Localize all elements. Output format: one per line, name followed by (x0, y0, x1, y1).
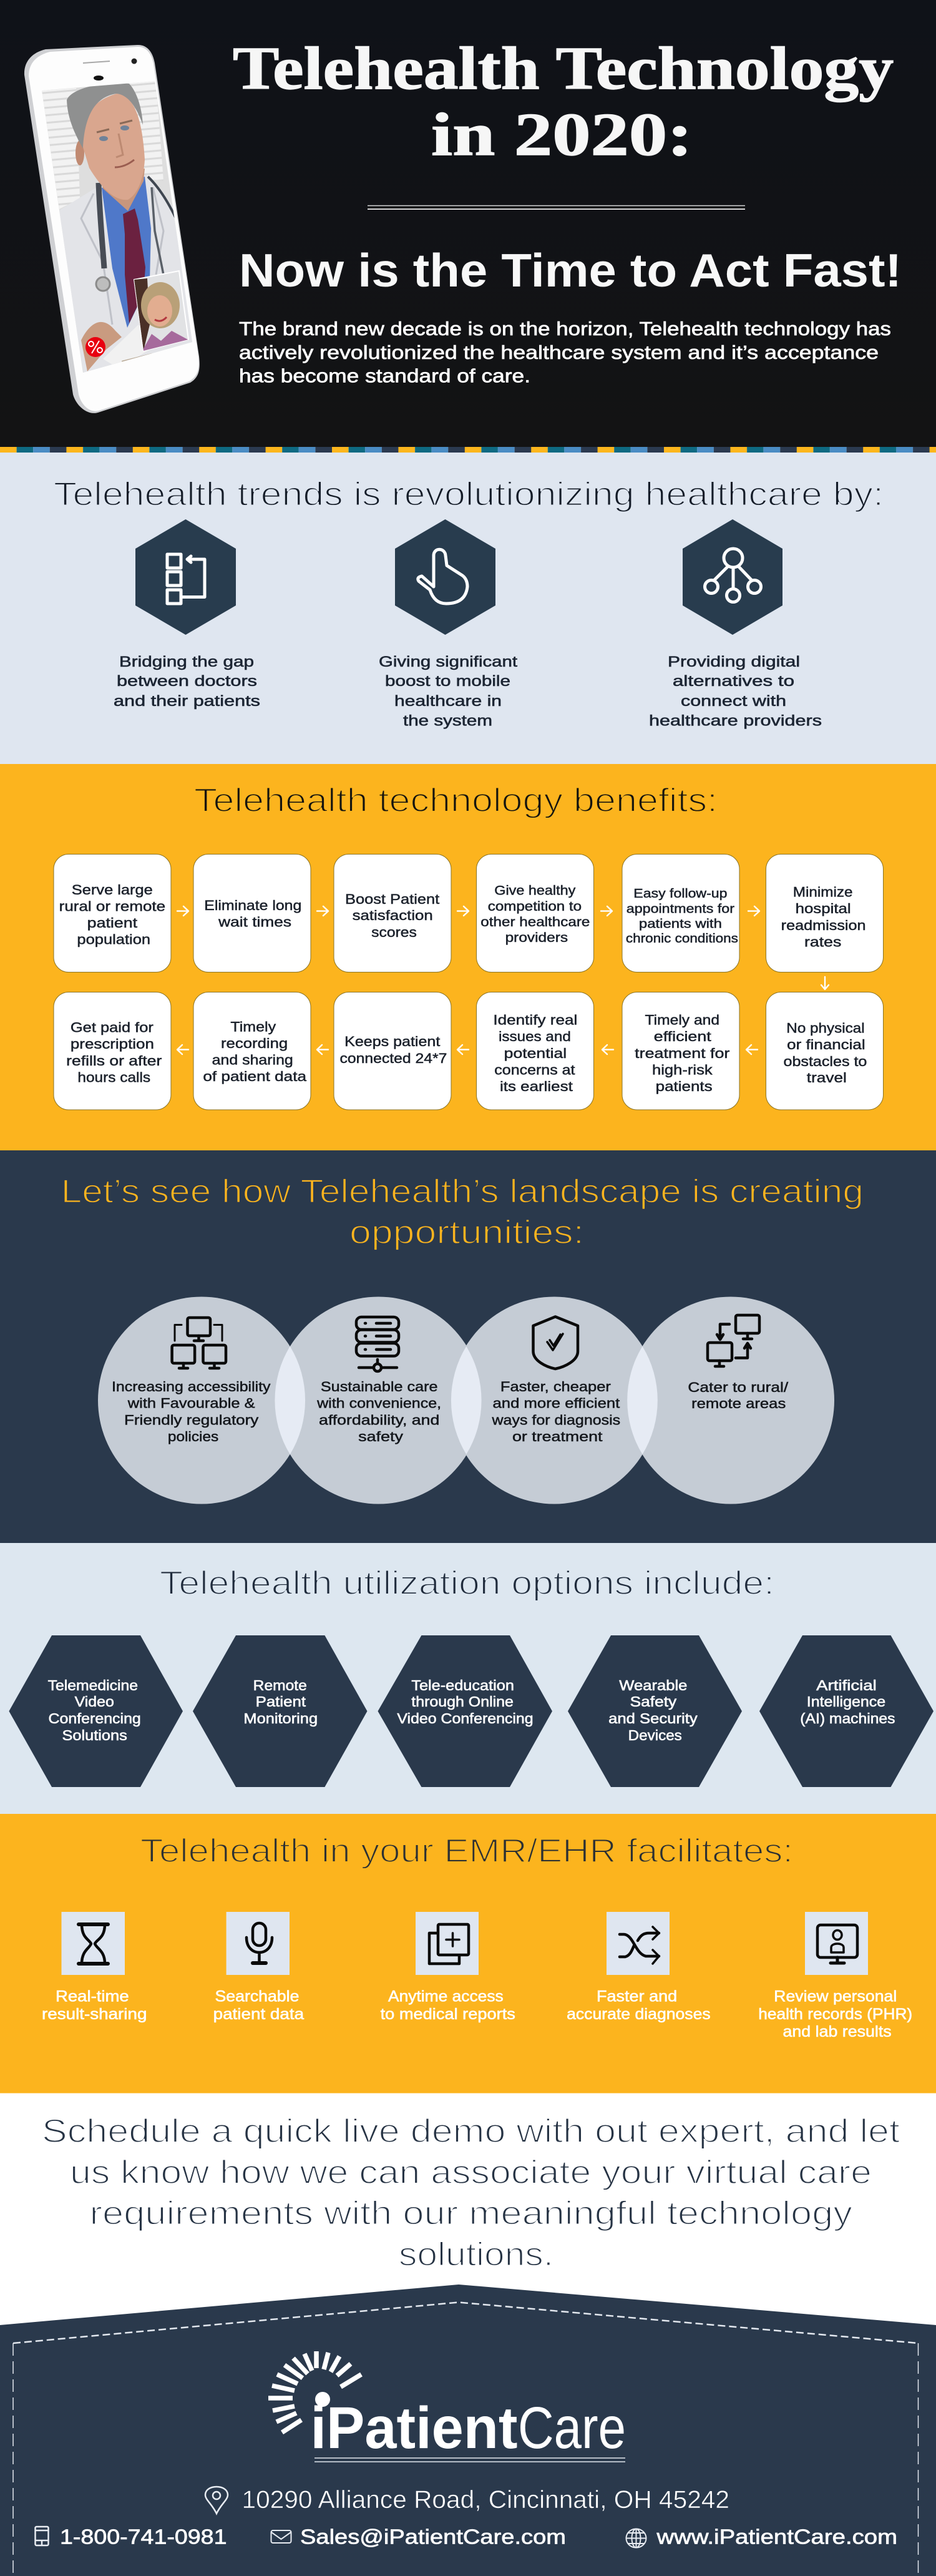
hexagon: telemedicine (9, 1635, 183, 1787)
circle text: and more efficient (493, 1396, 620, 1411)
item: medical reports (381, 1912, 515, 2023)
item: real-time result sharing: result-sharing (42, 2005, 147, 2023)
card row 2: its earliest (500, 1079, 573, 1094)
subtitle: Now is the Time to Act Fast! (239, 244, 902, 296)
card row 1: rural or remote (59, 899, 165, 914)
icon: server stack (356, 1317, 399, 1371)
hexagon: wearables: Wearable (619, 1677, 687, 1693)
item: personal health records: and lab results (782, 2023, 892, 2040)
card row 1: competition to (488, 899, 582, 914)
icon: location pin (205, 2487, 228, 2514)
panel: header (0, 0, 936, 447)
intro paragraph: has become standard of care. (239, 366, 530, 387)
icon: stacked documents with plus (429, 1924, 469, 1964)
intro paragraph (239, 318, 891, 387)
item: medical reports: Anytime access (388, 1988, 504, 2005)
item: bridging the gap: between doctors (117, 673, 257, 690)
card row 1: rates (804, 934, 841, 950)
panel: landscape opportunities (0, 1150, 936, 1543)
call to action text: solutions. (399, 2236, 553, 2273)
item: digital alternatives: alternatives to (673, 673, 794, 690)
hexagon: telemedicine: Solutions (62, 1727, 127, 1743)
circle text: policies (168, 1429, 218, 1444)
icon: pointing hand (418, 549, 467, 604)
card row 1: readmission (781, 918, 866, 933)
icon: monitor with person (817, 1925, 857, 1963)
card row 1: other healthcare (480, 915, 590, 929)
card row 2 (54, 992, 884, 1110)
hexagon: tele-education (378, 1635, 552, 1787)
call to action text: Schedule a quick live demo with out expert, and let (42, 2113, 900, 2150)
icon: shield with check (533, 1317, 578, 1369)
card row 1: Minimize (793, 884, 852, 900)
item: medical reports: to medical reports (381, 2005, 515, 2023)
hexagon: tele-education: through Online (411, 1693, 514, 1710)
logo: iPatientCare (268, 2351, 626, 2462)
arrows: row 2 right to left (177, 1045, 758, 1054)
hexagon: artificial intelligence: Artificial (816, 1677, 877, 1693)
call to action text: us know how we can associate your virtual care (70, 2154, 872, 2191)
card row 1 (54, 854, 884, 972)
item: mobile healthcare: healthcare in (394, 693, 502, 710)
panel: healthcare trends (0, 453, 936, 764)
card row 2: recording (221, 1036, 288, 1051)
circle text: Faster, cheaper (500, 1379, 611, 1394)
circle text: Cater to rural/ (688, 1379, 789, 1395)
card row 1: population (77, 932, 150, 948)
item: mobile healthcare (379, 519, 517, 729)
card row 2: hours calls (77, 1070, 150, 1085)
card row 2: prescription (71, 1036, 154, 1052)
item: digital alternatives: connect with (681, 693, 786, 710)
card row 2: Timely (230, 1019, 276, 1035)
item: bridging the gap: and their patients (114, 693, 260, 710)
card row 1: patient (87, 915, 138, 931)
item: faster diagnoses: accurate diagnoses (567, 2005, 711, 2023)
arrows: row 1 left to right (177, 906, 759, 916)
venn circles (98, 1297, 834, 1504)
arrow: down to row 2 (821, 977, 829, 989)
hexagon: wearables: Devices (628, 1727, 682, 1743)
card row 2: high-risk (652, 1062, 713, 1078)
contact: email: Sales@iPatientCare.com (300, 2525, 566, 2548)
hexagon: telemedicine: Video (75, 1693, 114, 1710)
card row 2: Identify real (493, 1012, 577, 1028)
card row 1: appointments for (626, 902, 734, 916)
title: Telehealth Technology (233, 35, 894, 102)
icon: shuffle arrows (620, 1927, 659, 1964)
card row 2: No physical (786, 1021, 865, 1036)
card row 2: Get paid for (71, 1020, 154, 1035)
hexagon: wearables: and Security (608, 1710, 698, 1726)
logo: iPatientCare: Care (518, 2395, 626, 2461)
heading: Telehealth utilization options include: (160, 1565, 774, 1602)
panel: technology benefits (0, 764, 936, 1150)
card row 2: connected 24*7 (339, 1050, 447, 1066)
circle text: remote areas (691, 1396, 786, 1411)
item: searchable patient data: Searchable (215, 1988, 299, 2005)
item: faster diagnoses (567, 1912, 711, 2023)
panel: EMR/EHR facilitates (0, 1814, 936, 2094)
icon: red percent badge (85, 337, 105, 357)
circle text: Increasing accessibility (112, 1379, 271, 1394)
icon: hourglass (79, 1924, 108, 1964)
contact: phone: 1-800-741-0981 (60, 2525, 227, 2548)
call to action text: requirements with our meaningful technology (90, 2195, 853, 2231)
hexagon: remote monitoring: Patient (256, 1693, 306, 1710)
heading: Telehealth trends is revolutionizing healthcare by: (54, 476, 884, 513)
card row 2: efficient (654, 1029, 712, 1044)
hexagon: wearables: Safety (630, 1693, 677, 1710)
card row 2: or financial (787, 1037, 865, 1052)
card row 2: travel (807, 1070, 847, 1085)
intro paragraph: actively revolutionized the healthcare system and it’s acceptance (239, 342, 879, 363)
item: mobile healthcare: boost to mobile (385, 673, 510, 690)
circle text: with Favourable & (127, 1396, 255, 1411)
item: faster diagnoses: Faster and (597, 1988, 677, 2005)
circle text: safety (358, 1429, 403, 1444)
card row 1: hospital (796, 901, 851, 916)
hexagon: wearables (568, 1635, 742, 1787)
item: searchable patient data (213, 1912, 304, 2023)
card row 1: patients with (639, 918, 722, 931)
hexagon: artificial intelligence: (AI) machines (800, 1710, 895, 1726)
item: real-time result sharing: Real-time (56, 1988, 129, 2005)
card row 2: issues and (499, 1029, 571, 1044)
intro paragraph: The brand new decade is on the horizon, Telehealth technology has (239, 318, 891, 340)
icon: flow boxes with return arrow (167, 554, 205, 604)
item: digital alternatives: Providing digital (668, 654, 800, 670)
card row 1: Give healthy (494, 884, 576, 898)
hexagon: tele-education: Tele-education (411, 1677, 514, 1693)
icon: microphone (246, 1923, 272, 1963)
card row 2: refills or after (66, 1053, 162, 1069)
contact: website: www.iPatientCare.com (656, 2525, 897, 2548)
card row 2: patients (656, 1079, 713, 1094)
card row 1: Eliminate long (204, 898, 301, 913)
card row 2: concerns at (494, 1062, 575, 1078)
heading: Telehealth in your EMR/EHR facilitates: (140, 1833, 793, 1869)
card row 1: Easy follow-up (633, 887, 728, 901)
item: personal health records: Review personal (774, 1988, 897, 2005)
hexagon: artificial intelligence (759, 1635, 934, 1787)
card row 1: chronic conditions (626, 932, 738, 946)
circle text: Sustainable care (321, 1379, 438, 1394)
card row 2: treatment for (635, 1046, 730, 1061)
icon: network nodes (705, 549, 761, 602)
card row 2: and sharing (212, 1052, 293, 1068)
hexagon: telemedicine: Conferencing (49, 1710, 141, 1726)
card row 2: obstacles to (784, 1054, 867, 1069)
title: in 2020: (431, 101, 693, 168)
icon: exchanging monitors (708, 1315, 759, 1366)
item: mobile healthcare: Giving significant (379, 654, 517, 670)
card row 1: satisfaction (353, 908, 433, 923)
hexagon: remote monitoring: Monitoring (243, 1710, 318, 1726)
inset: patient video (134, 271, 189, 351)
item: bridging the gap: Bridging the gap (119, 654, 254, 670)
item: personal health records (758, 1912, 912, 2040)
title (233, 35, 894, 168)
panel: call to action (0, 2094, 936, 2576)
item: real-time result sharing (42, 1912, 147, 2023)
call to action text (42, 2113, 900, 2273)
icon: connected monitors (172, 1318, 226, 1368)
circle text: ways for diagnosis (491, 1412, 620, 1428)
heading: opportunities: (349, 1214, 584, 1251)
item: digital alternatives (649, 519, 822, 729)
card row 2: Timely and (645, 1012, 719, 1028)
hexagon: remote monitoring: Remote (253, 1677, 307, 1693)
heading: Telehealth technology benefits: (194, 782, 718, 819)
circle text: with convenience, (316, 1396, 441, 1411)
hexagon: artificial intelligence: Intelligence (807, 1693, 885, 1710)
heading: Let’s see how Telehealth’s landscape is creating (61, 1173, 864, 1210)
item: personal health records: health records (PHR) (758, 2005, 912, 2023)
circle text: affordability, and (319, 1412, 439, 1428)
panel: utilization options (0, 1543, 936, 1814)
circle text (112, 1379, 789, 1444)
card row 1: providers (505, 931, 568, 945)
item: mobile healthcare: the system (403, 713, 492, 729)
heading (61, 1173, 864, 1251)
item: bridging the gap (114, 519, 260, 710)
address: 10290 Alliance Road, Cincinnati, OH 45242 (242, 2486, 729, 2514)
card row 2: of patient data (203, 1069, 307, 1084)
item: searchable patient data: patient data (213, 2005, 304, 2023)
hexagon: remote monitoring (193, 1635, 367, 1787)
card row 1: Serve large (72, 882, 153, 898)
illustration: smartphone video call with doctor (24, 45, 200, 413)
logo: iPatientCare: iPatient (311, 2395, 518, 2461)
circle text: Friendly regulatory (124, 1412, 258, 1428)
hexagon: telemedicine: Telemedicine (48, 1677, 138, 1693)
item: digital alternatives: healthcare providers (649, 713, 822, 729)
card row 1: Boost Patient (345, 891, 440, 907)
card row 2: Keeps patient (344, 1034, 441, 1049)
card row 1: scores (371, 924, 417, 940)
card row 1: wait times (218, 914, 291, 930)
panel: footer (0, 2285, 936, 2576)
hexagon: tele-education: Video Conferencing (397, 1710, 534, 1726)
card row 2: potential (504, 1046, 567, 1061)
circle text: or treatment (512, 1429, 603, 1444)
